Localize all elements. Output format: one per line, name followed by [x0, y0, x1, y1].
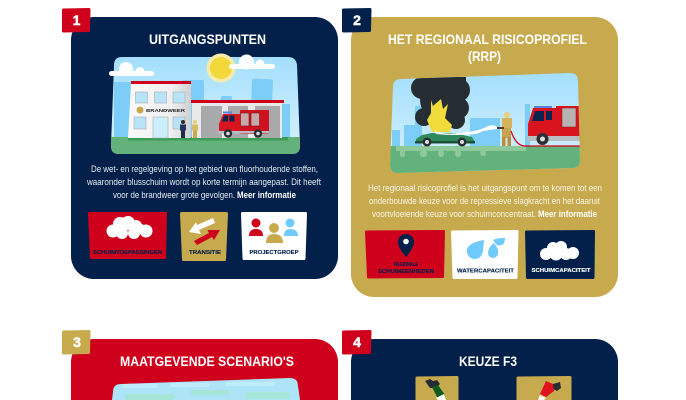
- text block 2: Meer informatie: [538, 209, 597, 219]
- heading: keuze f3: KEUZE F3: [459, 354, 517, 369]
- icon: foam cloud: [106, 216, 152, 239]
- heading: rrp: HET REGIONAAL RISICOPROFIEL: [388, 32, 587, 47]
- panel 3: maatgevende scenario's: [64, 332, 338, 400]
- icon: arrows: [189, 218, 220, 245]
- tile: regionale schuimeenheden: SCHUIMEENHEDEN: [378, 269, 434, 275]
- panel 2: regionaal risicoprofiel: [344, 10, 618, 297]
- icon: red extinguisher: [538, 381, 561, 400]
- icon: foam cloud: [540, 241, 579, 260]
- panel 1: uitgangspunten: [64, 10, 338, 279]
- tile: red extinguisher: [518, 378, 570, 400]
- illustration: fire station: BRANDWEER: [146, 108, 186, 114]
- tile: regionale schuimeenheden: REGIONALE: [394, 262, 418, 268]
- tile: schuimcapaciteit: [526, 232, 594, 278]
- badge 2: [344, 10, 370, 31]
- badge 1: 1: [73, 12, 81, 28]
- text block 1: waaronder blusschuim wordt op korte termijn aangepast. Dit heeft: [86, 177, 321, 187]
- text block 1: voor de brandweer grote gevolgen.: [113, 190, 235, 200]
- badge 2: 2: [353, 12, 361, 28]
- text block 1: Meer informatie: [237, 190, 296, 200]
- icon: people: [249, 218, 298, 243]
- panel 4: keuze f3: [344, 332, 618, 400]
- tile: transitie: [182, 214, 226, 260]
- tile: schuimtoepassingen: SCHUIMTOEPASSINGEN: [93, 250, 162, 256]
- tile: regionale schuimeenheden: [366, 232, 444, 277]
- heading: rrp: (RRP): [468, 49, 501, 64]
- badge 4: [344, 332, 370, 353]
- heading: uitgangspunten: UITGANGSPUNTEN: [149, 32, 266, 47]
- tile: green extinguisher: [417, 378, 457, 400]
- tile: transitie: TRANSITIE: [189, 250, 221, 256]
- heading: scenario's: MAATGEVENDE SCENARIO'S: [120, 354, 294, 369]
- icon: green extinguisher: [425, 379, 446, 400]
- badge 3: 3: [73, 334, 81, 350]
- tile: watercapaciteit: WATERCAPACITEIT: [457, 268, 515, 274]
- tile: watercapaciteit: [452, 232, 517, 278]
- text block 2: voortvloeiende keuze voor schuimconcentraat.: [372, 209, 536, 219]
- text block 1: De wet- en regelgeving op het gebied van fluorhoudende stoffen,: [91, 164, 318, 174]
- illustration: fire station: [109, 54, 302, 155]
- tile: schuimtoepassingen: [90, 214, 166, 258]
- icon: water drops: [467, 238, 505, 259]
- illustration: scenarios: [112, 378, 300, 400]
- illustration: car fire: [388, 70, 582, 176]
- tile: projectgroep: [242, 214, 306, 258]
- badge 4: 4: [353, 334, 361, 350]
- tile: projectgroep: PROJECTGROEP: [250, 250, 299, 256]
- text block 2: [368, 183, 602, 219]
- heading: rrp: [388, 32, 587, 64]
- tile: schuimcapaciteit: SCHUIMCAPACITEIT: [532, 268, 591, 274]
- text block 2: Het regionaal risicoprofiel is het uitgangspunt om te komen tot een: [368, 183, 602, 193]
- badge 3: [64, 332, 89, 353]
- icon: map pin: [398, 234, 414, 257]
- text block 2: onderbouwde keuze voor de repressieve slagkracht en het daaruit: [369, 196, 600, 206]
- badge 1: [64, 10, 89, 31]
- text block 1: [86, 164, 321, 200]
